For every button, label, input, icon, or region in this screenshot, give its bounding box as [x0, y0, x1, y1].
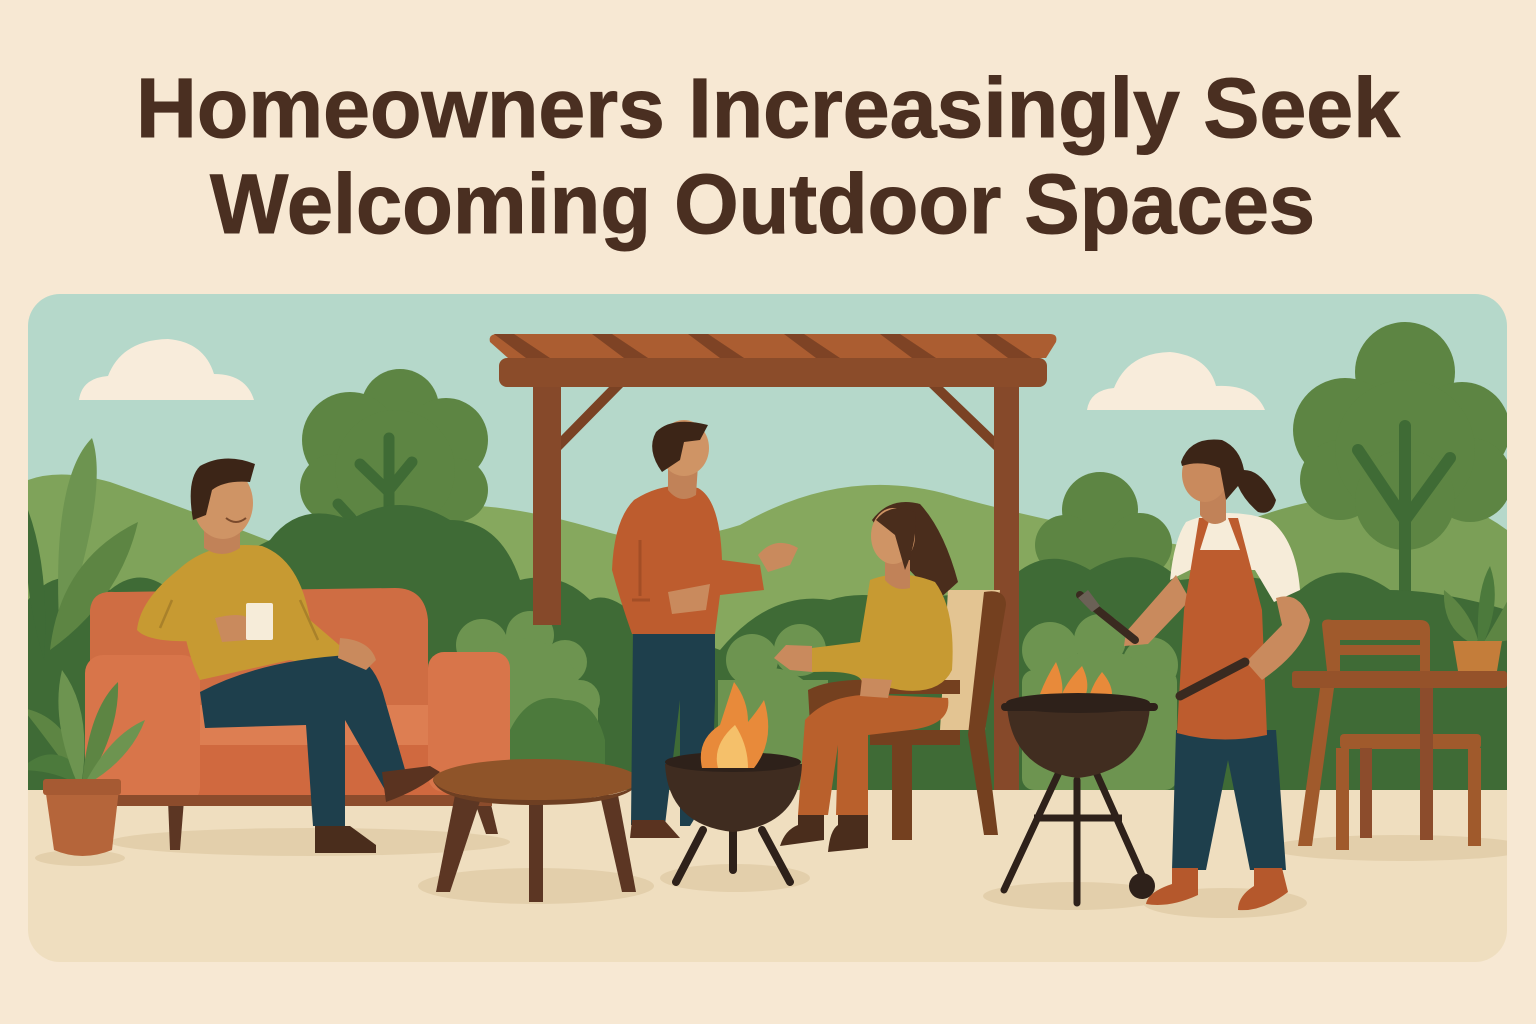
- head: [1200, 490, 1226, 524]
- cloud right: [1087, 352, 1265, 410]
- sofa man torso: [178, 545, 345, 680]
- hands: [758, 543, 798, 572]
- legs: [1172, 730, 1286, 870]
- darker lower bush: [510, 698, 605, 764]
- standing man: [612, 420, 798, 838]
- hand on knee: [338, 638, 376, 670]
- tree right: [1293, 322, 1507, 591]
- dark hedge: [28, 505, 1507, 790]
- grill flames: [1040, 662, 1112, 694]
- title: [136, 61, 1400, 251]
- spatula: [1080, 595, 1135, 640]
- sofa: [85, 588, 510, 850]
- potted plant: [20, 670, 145, 856]
- patio chair and table: [1292, 620, 1507, 850]
- ground: [28, 790, 1507, 962]
- hands: [774, 645, 812, 672]
- legs: [798, 695, 948, 815]
- shoes: [1146, 868, 1198, 905]
- title: Homeowners Increasingly Seek: [136, 61, 1400, 155]
- pergola: [490, 334, 1056, 790]
- shirt: [1170, 513, 1300, 602]
- sky: [28, 294, 1507, 544]
- table plant: [1444, 566, 1510, 671]
- mid bushes: [456, 611, 1178, 790]
- ground shadows: [35, 828, 1530, 918]
- trousers: [631, 630, 715, 826]
- tree left: [300, 369, 488, 530]
- tongs: [1180, 662, 1245, 696]
- cloud left: [79, 339, 254, 400]
- man on sofa: [137, 458, 440, 853]
- title: Welcoming Outdoor Spaces: [210, 157, 1315, 251]
- fire pit: [665, 682, 802, 882]
- shoes: [630, 820, 680, 838]
- arm left: [1124, 575, 1190, 646]
- head: [885, 560, 910, 589]
- head: [668, 470, 698, 499]
- hills: [28, 474, 1507, 650]
- hair back: [872, 502, 958, 600]
- shoes: [780, 815, 824, 846]
- shoes: [382, 766, 440, 802]
- mug: [215, 615, 248, 642]
- torso: [812, 574, 953, 691]
- tree left trunk: [338, 438, 412, 530]
- flames: [701, 682, 768, 768]
- arm right: [1246, 596, 1310, 680]
- grill: [1001, 662, 1158, 903]
- seated woman: [774, 502, 958, 852]
- neck: [204, 531, 240, 554]
- apron: [1177, 518, 1267, 740]
- lawn chair: [808, 590, 1006, 840]
- head: [196, 482, 253, 539]
- bush behind griller: [1035, 472, 1172, 570]
- tall plant left: [26, 438, 138, 660]
- coffee table: [433, 759, 640, 902]
- woman grilling: [1078, 439, 1310, 910]
- legs: [200, 655, 408, 826]
- panel: backyard scene: [20, 294, 1530, 962]
- torso: [612, 486, 764, 634]
